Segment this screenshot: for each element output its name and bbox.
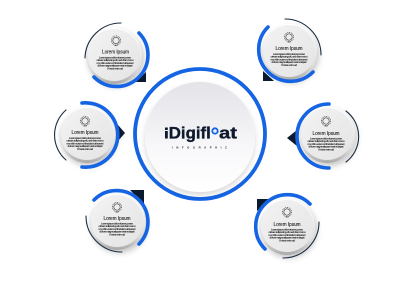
icon: bulb xyxy=(80,116,90,126)
pointer xyxy=(118,125,125,141)
text block: ctetuer adipiscing elit, sed diam nonu xyxy=(308,139,345,143)
text block: my nibh euismod tincidunt ut laoreet xyxy=(270,57,308,61)
pointer xyxy=(263,71,274,81)
icon: bulb xyxy=(321,116,331,126)
pointer xyxy=(287,130,297,146)
text block xyxy=(308,136,345,151)
central ring xyxy=(135,69,265,199)
heading: Lorem Ipsum xyxy=(72,130,98,136)
disc xyxy=(259,199,315,255)
text block: dolore magna aliquam erat volutpat xyxy=(100,230,135,234)
text block: dolore magna aliquam erat volutpat xyxy=(270,236,305,240)
text block xyxy=(66,136,104,151)
heading: Lorem Ipsum xyxy=(102,50,129,56)
disc xyxy=(261,24,317,80)
text block: Ut wisi enim ad xyxy=(279,238,295,242)
text block: Lorem ipsum dolor sit amet, conse xyxy=(271,228,304,232)
logo wordmark end: at xyxy=(219,124,238,142)
pointer xyxy=(257,199,269,211)
text block xyxy=(98,222,136,236)
blue arc xyxy=(259,27,313,81)
logo wordmark start: Digifl xyxy=(169,124,211,142)
text block: Lorem ipsum dolor sit amet, conse xyxy=(69,136,102,140)
dark arc xyxy=(86,216,122,252)
blue arc xyxy=(297,104,329,168)
central disc xyxy=(145,82,255,192)
text block xyxy=(270,52,308,67)
text block: ctetuer adipiscing elit, sed diam nonu xyxy=(268,230,306,234)
panel: middle left xyxy=(55,103,125,167)
disc xyxy=(89,194,145,250)
text block: dolore magna aliquam erat volutpat xyxy=(98,64,133,68)
logo i mark xyxy=(165,128,168,138)
text block: dolore magna aliquam erat volutpat xyxy=(272,60,307,64)
panel: bottom left xyxy=(86,190,148,252)
icon: bulb xyxy=(282,207,292,217)
blue arc xyxy=(94,191,148,244)
blue arc xyxy=(94,33,148,86)
icon: bulb xyxy=(111,36,121,46)
text block: Ut wisi enim ad xyxy=(77,147,93,151)
text block: my nibh euismod tincidunt ut laoreet xyxy=(268,233,306,237)
panel: top right xyxy=(259,19,321,81)
text block: Ut wisi enim ad xyxy=(281,63,297,67)
text block: Lorem ipsum dolor sit amet, conse xyxy=(101,222,134,226)
heading: Lorem Ipsum xyxy=(274,222,300,228)
logo subtitle: INFOGRAPHIC xyxy=(172,146,227,150)
blue arc xyxy=(82,103,118,167)
disc xyxy=(86,28,142,84)
pointer xyxy=(136,72,146,82)
text block: Lorem ipsum dolor sit amet, conse xyxy=(273,52,306,56)
icon: bulb xyxy=(112,202,122,212)
text block: dolore magna aliquam erat volutpat xyxy=(68,144,103,148)
text block: Ut wisi enim ad xyxy=(318,147,334,151)
panel: middle right xyxy=(287,104,359,168)
blue arc xyxy=(256,195,310,249)
text block: ctetuer adipiscing elit, sed diam nonu xyxy=(66,139,104,143)
icon: bulb xyxy=(284,32,294,42)
heading: Lorem Ipsum xyxy=(312,131,340,137)
text block: Ut wisi enim ad xyxy=(107,66,123,70)
logo xyxy=(165,124,238,150)
text block xyxy=(268,228,306,242)
text block: ctetuer adipiscing elit, sed diam nonu xyxy=(96,58,134,62)
text block: my nibh euismod tincidunt ut laoreet xyxy=(66,141,104,145)
heading: Lorem Ipsum xyxy=(104,216,130,222)
dark arc xyxy=(285,19,321,55)
text block: Lorem ipsum dolor sit amet, conse xyxy=(99,56,132,60)
dark arc xyxy=(283,222,319,258)
text block: my nibh euismod tincidunt ut laoreet xyxy=(308,142,345,146)
dark arc xyxy=(55,110,66,160)
dark arc xyxy=(346,111,359,162)
text block: my nibh euismod tincidunt ut laoreet xyxy=(96,61,134,65)
disc xyxy=(299,107,355,163)
text block: ctetuer adipiscing elit, sed diam nonu xyxy=(98,224,136,228)
panel: bottom right xyxy=(256,195,319,258)
panel: top left xyxy=(85,23,148,86)
pointer xyxy=(130,190,144,204)
logo blue ring xyxy=(212,128,218,134)
dark arc xyxy=(85,23,121,58)
text block: my nibh euismod tincidunt ut laoreet xyxy=(98,227,136,231)
text block xyxy=(96,56,134,70)
text block: Lorem ipsum dolor sit amet, conse xyxy=(310,136,342,140)
text block: Ut wisi enim ad xyxy=(109,232,125,236)
disc xyxy=(59,107,115,163)
text block: dolore magna aliquam erat volutpat xyxy=(308,145,344,149)
heading: Lorem Ipsum xyxy=(276,46,302,52)
text block: ctetuer adipiscing elit, sed diam nonu xyxy=(270,55,308,59)
